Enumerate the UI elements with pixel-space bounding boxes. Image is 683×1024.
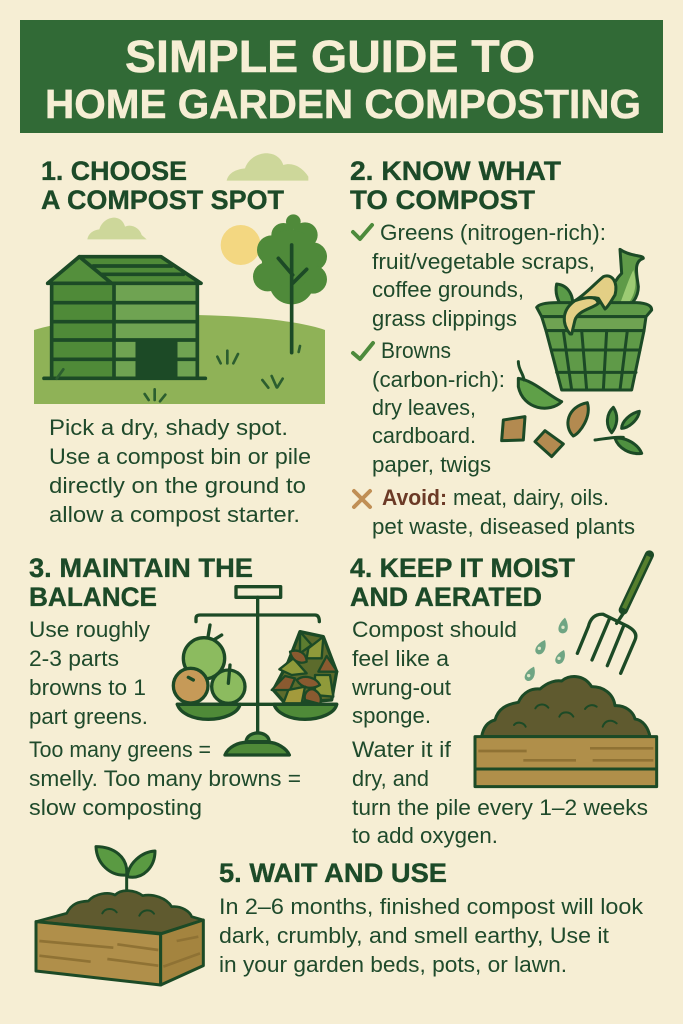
heading: step 4 xyxy=(350,553,575,612)
text: step 4 description: wrung-out xyxy=(351,675,451,700)
illustration: balance scale with apples and leaves xyxy=(173,587,337,755)
text: step 1 description: Use a compost bin or pile xyxy=(49,444,311,469)
illustration: shed, tree, sun and clouds xyxy=(34,153,327,404)
text: step 3 ratio: part greens. xyxy=(29,704,148,729)
text: browns list: (carbon-rich): xyxy=(372,367,505,392)
heading: step 1: A COMPOST SPOT xyxy=(41,185,285,215)
panel: step 3 maintain the balance xyxy=(29,553,337,820)
text: step 5 description xyxy=(219,894,644,977)
text: avoid list: Avoid: xyxy=(382,485,447,510)
text: step 3 warning xyxy=(29,737,301,820)
text: step 3 ratio: Use roughly xyxy=(29,617,150,642)
text: step 4 description: Water it if xyxy=(352,737,452,762)
text: step 5 description: in your garden beds, pots, or lawn. xyxy=(219,952,567,977)
illustration: compost pile, water drops and fork xyxy=(475,555,657,787)
panel: step 4 keep it moist and aerated xyxy=(350,553,657,848)
text: browns list: Browns xyxy=(381,338,451,363)
text: avoid list xyxy=(354,485,635,539)
heading: step 1 xyxy=(41,156,285,215)
heading: step 4: AND AERATED xyxy=(350,582,542,612)
text: browns list xyxy=(353,338,505,477)
text: step 1 description: allow a compost starter. xyxy=(49,502,300,527)
text: greens list: coffee grounds, xyxy=(372,277,524,302)
text: step 3 ratio: 2-3 parts xyxy=(29,646,119,671)
text: step 4 description: feel like a xyxy=(352,646,450,671)
panel: step 5 wait and use xyxy=(36,847,644,985)
text: step 3 warning: smelly. Too many browns = xyxy=(29,766,301,791)
text: browns list: dry leaves, xyxy=(372,395,476,420)
heading: step 3: BALANCE xyxy=(29,582,157,612)
heading: step 2 xyxy=(350,156,562,215)
heading: step 3 xyxy=(29,553,253,612)
text: step 5 description: In 2–6 months, finished compost will look xyxy=(219,894,644,919)
text: step 4 description: Compost should xyxy=(352,617,517,642)
heading: step 4: 4. KEEP IT MOIST xyxy=(350,553,575,583)
text: step 3 ratio xyxy=(29,617,150,729)
text: greens list xyxy=(353,220,606,331)
heading: step 5: 5. WAIT AND USE xyxy=(219,858,447,888)
panel: step 2 know what to compost xyxy=(350,156,652,539)
panel: step 1 choose a compost spot xyxy=(34,153,327,527)
text: step 3 ratio: browns to 1 xyxy=(29,675,146,700)
text: browns list: cardboard. xyxy=(372,423,476,448)
text: avoid list: pet waste, diseased plants xyxy=(372,514,635,539)
text: step 4 description xyxy=(351,617,648,848)
text: greens list: grass clippings xyxy=(372,306,517,331)
title banner xyxy=(20,20,663,133)
title banner: HOME GARDEN COMPOSTING xyxy=(45,81,641,127)
text: step 4 description: turn the pile every 1–2 weeks xyxy=(352,795,648,820)
text: step 1 description: Pick a dry, shady spot. xyxy=(49,415,288,440)
illustration: basket of scraps and loose leaves xyxy=(502,249,652,457)
text: avoid list: meat, dairy, oils. xyxy=(453,485,609,510)
heading: step 1: 1. CHOOSE xyxy=(41,156,187,186)
text: browns list: paper, twigs xyxy=(372,452,491,477)
heading: step 2: TO COMPOST xyxy=(350,185,536,215)
heading: step 2: 2. KNOW WHAT xyxy=(350,156,562,186)
text: step 1 description xyxy=(49,415,311,527)
illustration: wooden box with soil and sprout xyxy=(36,847,203,985)
text: step 3 warning: Too many greens = xyxy=(29,737,211,762)
text: greens list: fruit/vegetable scraps, xyxy=(372,249,595,274)
text: greens list: Greens (nitrogen-rich): xyxy=(380,220,606,245)
heading: step 3: 3. MAINTAIN THE xyxy=(29,553,253,583)
text: step 4 description: to add oxygen. xyxy=(352,823,498,848)
text: step 3 warning: slow composting xyxy=(29,795,202,820)
title banner: SIMPLE GUIDE TO xyxy=(125,31,535,82)
text: step 4 description: dry, and xyxy=(352,766,429,791)
text: step 1 description: directly on the ground to xyxy=(49,473,306,498)
text: step 4 description: sponge. xyxy=(352,703,431,728)
text: step 5 description: dark, crumbly, and smell earthy, Use it xyxy=(219,923,609,948)
